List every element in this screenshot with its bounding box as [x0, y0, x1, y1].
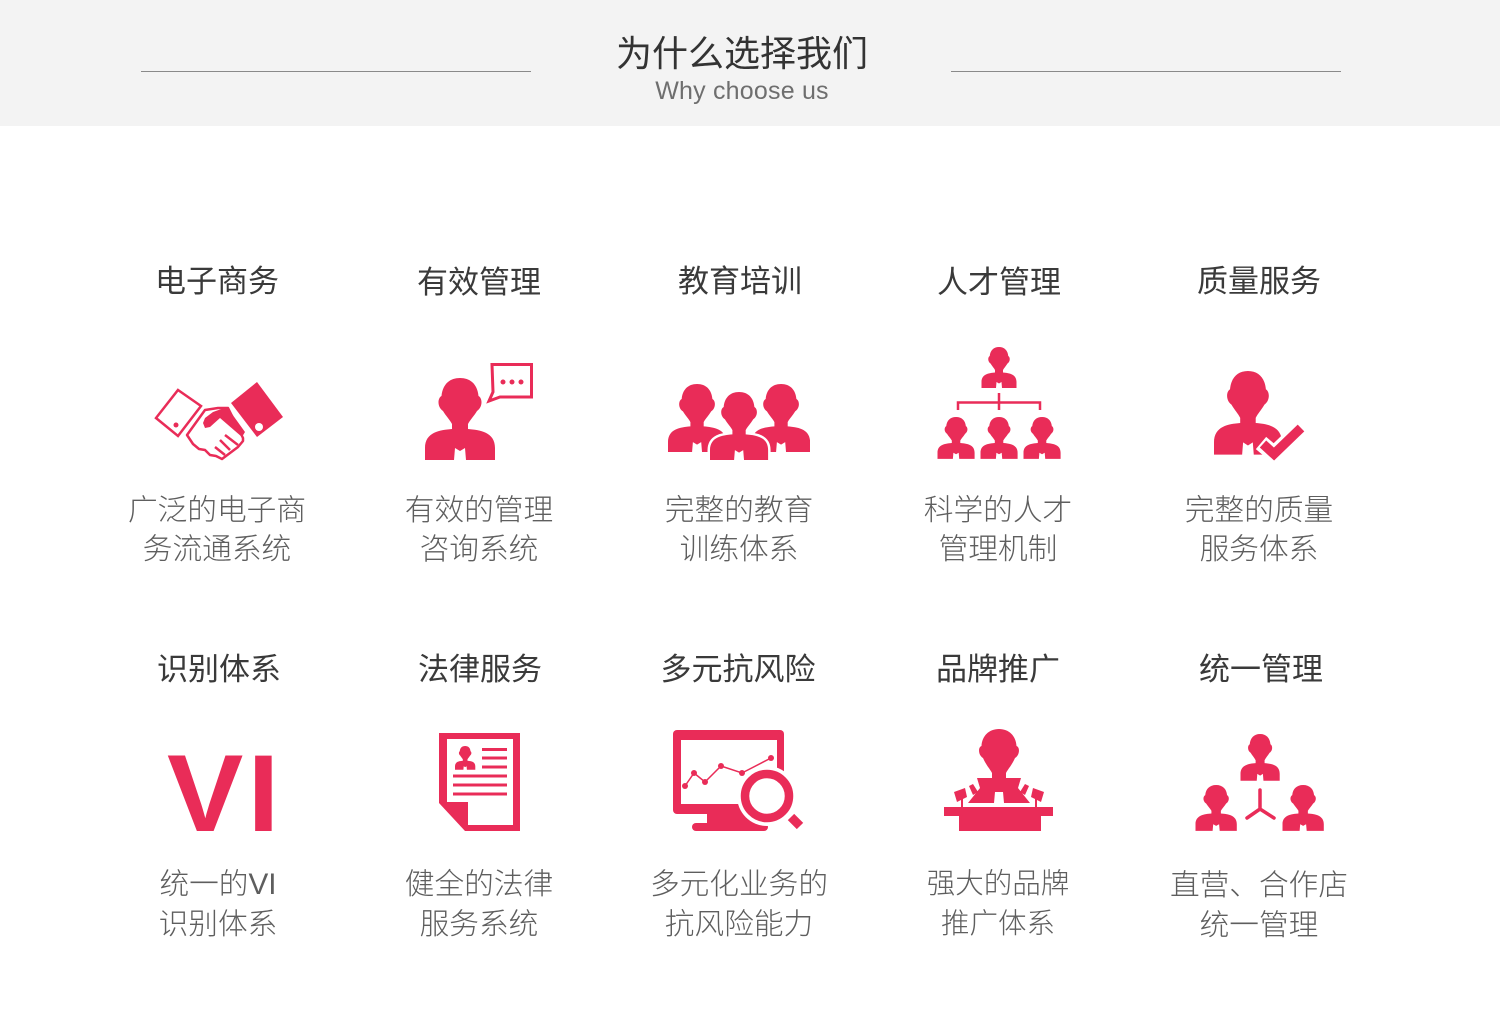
- description: [927, 868, 1069, 940]
- icon: person with speech bubble: [425, 363, 533, 460]
- description: [1185, 494, 1333, 566]
- panel: 有效管理: [405, 265, 553, 566]
- heading: 统一管理: [1199, 652, 1323, 687]
- description: 健全的法律: [405, 868, 553, 901]
- description: 咨询系统: [420, 533, 538, 566]
- panel: 教育培训: [665, 264, 813, 566]
- panel: 品牌推广: [927, 652, 1069, 940]
- heading: 法律服务: [418, 652, 542, 687]
- heading: 质量服务: [1197, 264, 1321, 299]
- description: [405, 868, 553, 940]
- icon: monitor with magnifier: [673, 730, 804, 831]
- icon: handshake: [154, 382, 283, 460]
- description: 统一的VI: [159, 868, 277, 901]
- description: [665, 494, 813, 566]
- description: 完整的教育: [665, 494, 813, 526]
- panel: 电子商务: [128, 264, 306, 566]
- description: [650, 868, 828, 940]
- panel: 统一管理: [1170, 652, 1348, 942]
- description: 训练体系: [680, 533, 798, 566]
- title: 为什么选择我们: [616, 32, 868, 74]
- heading: 教育培训: [678, 264, 802, 299]
- description: 抗风险能力: [665, 908, 813, 940]
- description: 多元化业务的: [650, 868, 828, 901]
- description: [405, 494, 553, 566]
- icon: org chart: [938, 347, 1061, 459]
- description: [924, 494, 1072, 566]
- description: 服务系统: [420, 908, 538, 940]
- description: [159, 868, 277, 940]
- heading: 品牌推广: [936, 652, 1060, 687]
- description: 识别体系: [159, 908, 277, 940]
- heading: 人才管理: [937, 265, 1061, 300]
- description: 直营、合作店: [1170, 869, 1348, 902]
- heading: 多元抗风险: [660, 652, 816, 687]
- heading: 有效管理: [417, 265, 541, 300]
- description: 推广体系: [941, 908, 1055, 940]
- icon: legal document: [439, 733, 520, 831]
- icon: person with check mark: [1214, 371, 1304, 460]
- description: 管理机制: [939, 533, 1057, 566]
- description: 有效的管理: [405, 494, 553, 526]
- description: 强大的品牌: [927, 868, 1069, 900]
- header band: [0, 0, 1500, 126]
- description: 科学的人才: [924, 494, 1072, 526]
- description: 完整的质量: [1185, 494, 1333, 526]
- panel: 多元抗风险: [650, 652, 828, 940]
- icon: three linked people: [1196, 734, 1324, 831]
- icon: three people: [668, 384, 810, 460]
- subtitle: Why choose us: [655, 77, 829, 105]
- heading: 识别体系: [157, 652, 281, 687]
- description: 广泛的电子商: [128, 494, 306, 526]
- panel: 识别体系: [157, 652, 281, 940]
- icon: speaker at podium: [944, 729, 1053, 831]
- description: [128, 494, 306, 566]
- panel: 质量服务: [1185, 264, 1333, 566]
- description: 统一管理: [1200, 908, 1318, 942]
- panel: 法律服务: [405, 652, 553, 940]
- heading: 电子商务: [155, 264, 279, 299]
- description: 服务体系: [1200, 533, 1318, 566]
- description: [1170, 869, 1348, 942]
- panel: 人才管理: [924, 265, 1072, 566]
- description: 务流通系统: [143, 533, 291, 566]
